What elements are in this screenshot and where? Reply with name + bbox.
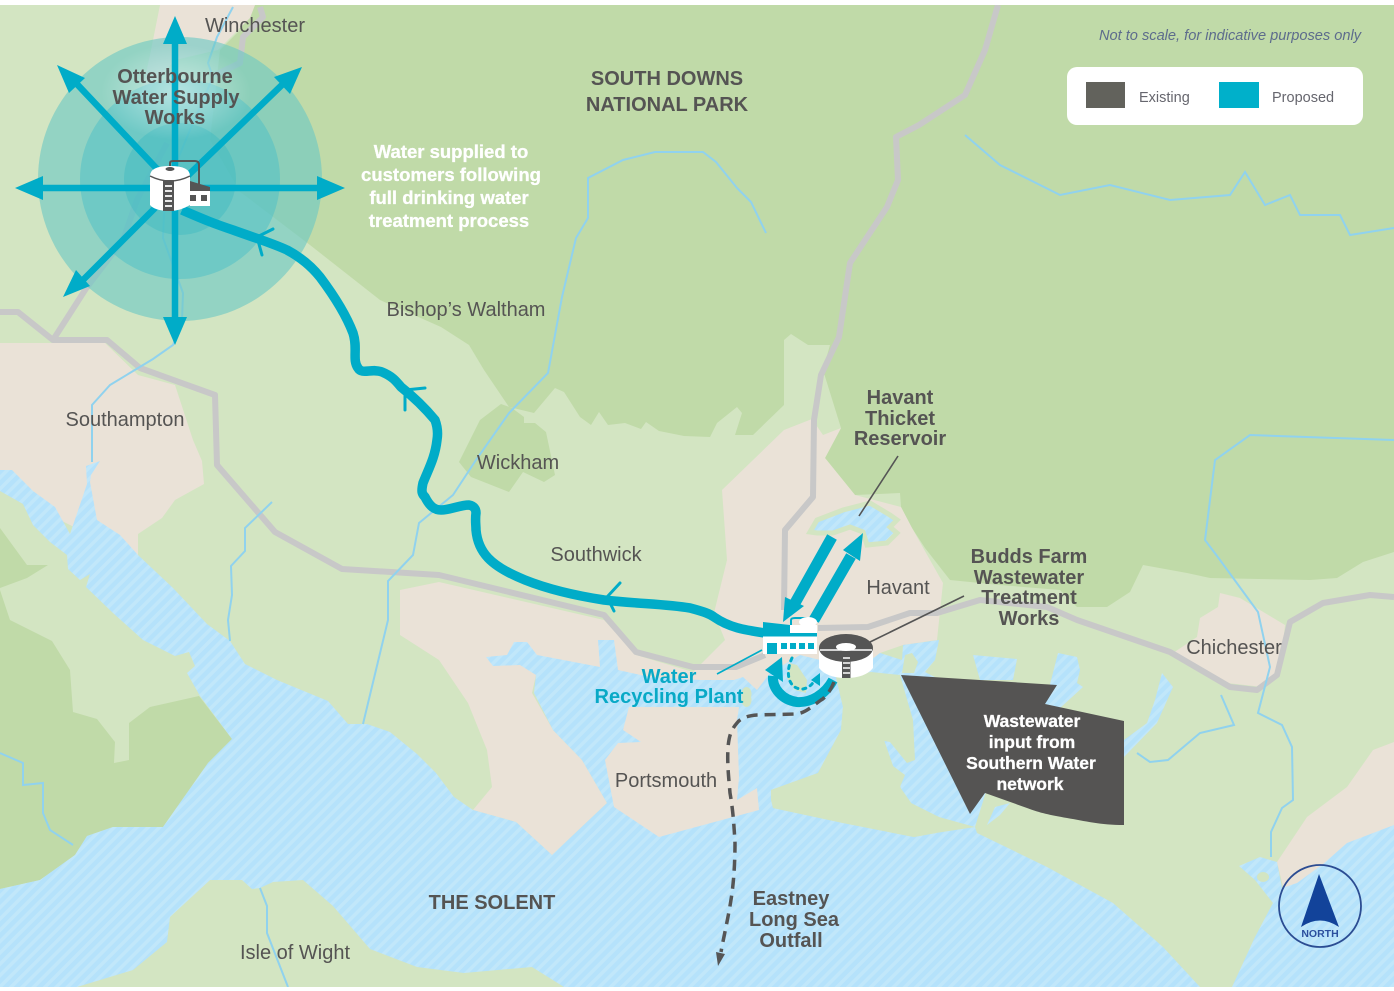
- distribution arrows: [15, 16, 345, 345]
- wastewater label: network: [996, 774, 1064, 794]
- arrows: to and from Havant Thicket Reservoir: [783, 533, 863, 622]
- roads: [0, 5, 1394, 690]
- label: South Downs National Park: SOUTH DOWNS: [591, 68, 743, 90]
- label: Havant Thicket Reservoir: Reservoir: [854, 428, 946, 450]
- wastewater label: Southern Water: [966, 753, 1096, 773]
- label: Havant Thicket Reservoir: Havant: [867, 387, 934, 409]
- legend: proposed: Proposed: [1272, 90, 1334, 106]
- western woodland: [0, 528, 232, 889]
- The Solent and harbours: [0, 461, 1394, 987]
- label: Eastney Long Sea Outfall: Eastney: [753, 888, 830, 910]
- legend: existing: Existing: [1139, 90, 1190, 106]
- Southampton urban: [0, 343, 204, 560]
- north arrow: [1279, 865, 1361, 947]
- icon: Otterbourne water supply works: [150, 161, 210, 211]
- pipeline: proposed transfer route: [182, 210, 765, 633]
- label: water supplied: customers following: [361, 164, 541, 185]
- Gosport, Fareham and Havant urban: [400, 419, 943, 855]
- Havant Thicket Reservoir water: [810, 503, 897, 545]
- leader lines: [717, 456, 964, 674]
- place names: Southwick: [550, 544, 643, 566]
- label: water supplied: Water supplied to: [374, 141, 528, 162]
- place names: Havant: [866, 577, 930, 599]
- icon: water recycling plant: [763, 617, 817, 654]
- label: Budds Farm: Wastewater: [974, 567, 1084, 589]
- south east urban: [1277, 742, 1394, 895]
- Chichester urban: [1173, 593, 1285, 687]
- Portsea Island urban: [605, 707, 759, 837]
- label: Budds Farm: Budds Farm: [971, 546, 1087, 568]
- place names: Chichester: [1186, 637, 1282, 659]
- label: Havant Thicket Reservoir: Thicket: [865, 408, 935, 430]
- South Downs National Park area: [210, 5, 1394, 607]
- pipeline flow chevrons: [257, 229, 620, 611]
- label: Water Recycling Plant: Water: [642, 666, 697, 688]
- Portsmouth and Langstone harbours: [486, 640, 843, 840]
- harbour islands: [742, 653, 1269, 882]
- label: Otterbourne Water Supply Works: Water Supply: [112, 87, 240, 109]
- label: Otterbourne Water Supply Works: Works: [145, 107, 205, 129]
- label: water supplied: full drinking water: [369, 187, 529, 208]
- Hayling Island: [771, 672, 939, 837]
- label: Otterbourne Water Supply Works: Otterbourne: [117, 66, 233, 88]
- place names: Wickham: [477, 452, 559, 474]
- label: Budds Farm: Treatment: [981, 587, 1077, 609]
- label: Eastney Long Sea Outfall: Long Sea: [749, 909, 840, 931]
- icon: Budds Farm wastewater treatment works: [819, 634, 873, 678]
- note: not to scale: Not to scale, for indicative purposes only: [1099, 28, 1363, 44]
- legend: proposed: [1219, 82, 1334, 108]
- label: Budds Farm: Works: [999, 608, 1059, 630]
- place names: Southampton: [66, 409, 184, 431]
- label: Water Recycling Plant: Recycling Plant: [595, 686, 744, 708]
- arrow: wastewater input: [901, 675, 1124, 825]
- legend: existing: [1086, 82, 1190, 108]
- legend: [1067, 67, 1363, 125]
- label: water supplied: treatment process: [369, 210, 529, 231]
- label: The Solent: THE SOLENT: [429, 892, 555, 914]
- place names: Portsmouth: [615, 770, 717, 792]
- north arrow: NORTH: [1301, 928, 1339, 940]
- Winchester urban: [150, 5, 255, 58]
- place names: Winchester: [205, 15, 305, 37]
- wastewater label: input from: [989, 732, 1075, 752]
- arrow: recycled water loop: [765, 657, 833, 702]
- dashed line: Eastney Long Sea Outfall: [716, 682, 834, 966]
- Wickham woodland: [459, 404, 555, 492]
- place names: Isle of Wight: [240, 942, 350, 964]
- place names: Bishop’s Waltham: [387, 299, 545, 321]
- Chichester Harbour water: [868, 640, 986, 827]
- wastewater label: Wastewater: [984, 711, 1080, 731]
- label: South Downs National Park: NATIONAL PARK: [586, 94, 749, 116]
- supply zone: concentric circles: [38, 37, 322, 321]
- label: Eastney Long Sea Outfall: Outfall: [759, 930, 823, 952]
